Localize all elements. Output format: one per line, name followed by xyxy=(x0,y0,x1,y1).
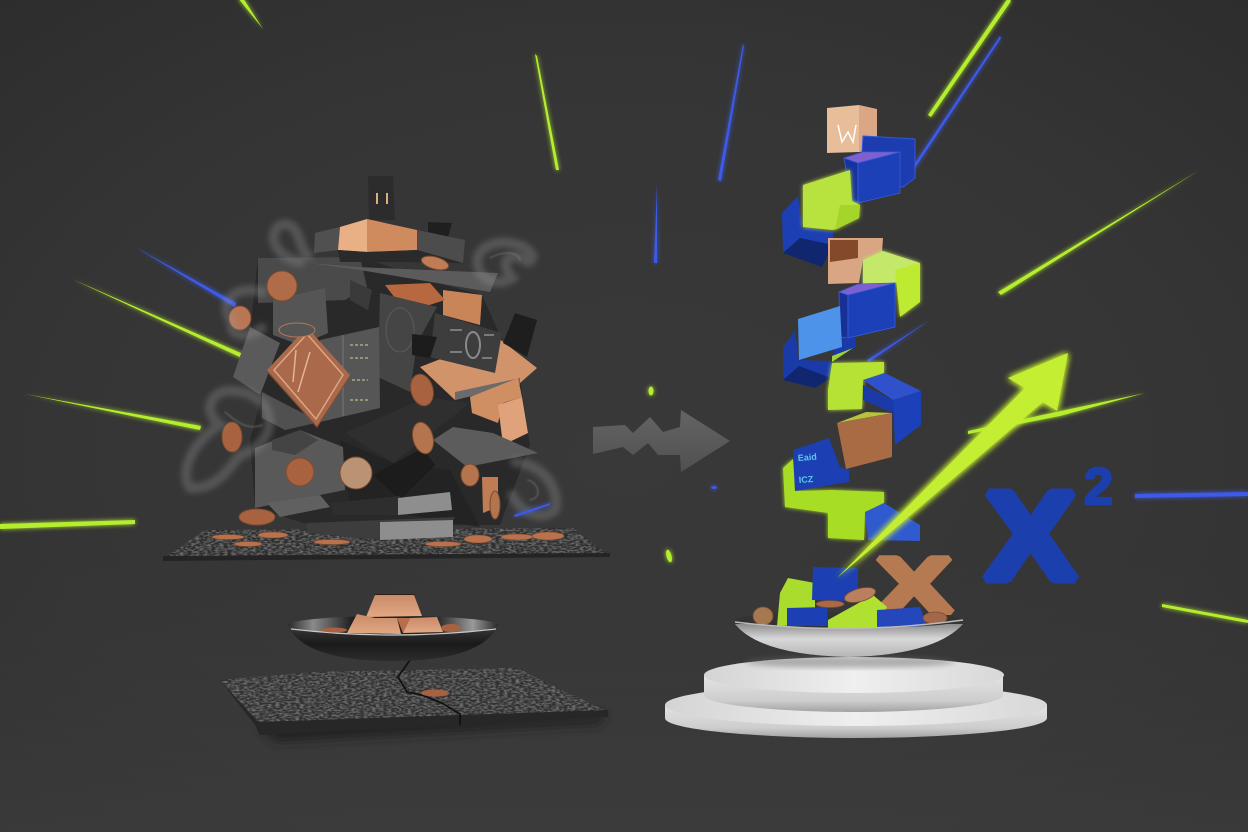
copper-brown block xyxy=(837,412,892,469)
dark mass xyxy=(340,440,480,527)
blue block 4 with glyphs xyxy=(783,331,831,388)
dark emblem box xyxy=(430,313,502,373)
green block 4 xyxy=(783,459,884,540)
top dark tile xyxy=(368,176,395,220)
dark slanted book xyxy=(345,397,470,463)
green block 3 xyxy=(828,362,884,410)
smoke wisps xyxy=(186,224,556,515)
blue streak in front of pile xyxy=(514,503,550,517)
small black tiles xyxy=(412,334,437,358)
coins on slate xyxy=(212,532,564,546)
blue block 5 xyxy=(863,373,921,445)
grey slab, left xyxy=(233,327,280,395)
copper strip xyxy=(482,477,498,513)
light-blue block xyxy=(798,306,856,362)
coins, lower pile xyxy=(222,372,500,525)
copper block, lower right xyxy=(470,378,528,445)
grey box, lower left xyxy=(255,430,345,508)
dish blocks xyxy=(777,567,927,628)
dish xyxy=(735,612,963,657)
blue glyph block: Eaid xyxy=(797,452,817,463)
right: marble dish with blocks, coins and X xyxy=(735,541,963,657)
left: bowl of gold bars on cracked slate xyxy=(220,594,608,742)
grey box, centre left xyxy=(273,288,328,345)
right: marble pedestal xyxy=(665,656,1047,738)
blue light streaks xyxy=(135,36,1248,498)
copper tablet, right xyxy=(420,337,537,400)
coins in bowl and on slate xyxy=(321,624,461,696)
right: ascending stack of blocks xyxy=(782,105,921,541)
lower disc xyxy=(665,684,1047,738)
book 1 xyxy=(330,492,452,515)
book 2 xyxy=(307,517,455,540)
cracked slate xyxy=(220,660,608,742)
dark filler behind pile xyxy=(250,257,530,525)
copper bars xyxy=(347,594,443,634)
copper and slate box xyxy=(314,219,465,263)
blue glyph block xyxy=(793,438,849,491)
small slate tile xyxy=(350,280,372,310)
upper disc xyxy=(704,656,1004,712)
left: chaotic pile on slate xyxy=(163,176,610,561)
green block xyxy=(803,170,860,230)
dark bowl xyxy=(288,616,498,661)
copper cube 2 xyxy=(828,238,883,284)
grey zigzag transformation arrow xyxy=(593,410,730,472)
grey lid xyxy=(267,495,330,517)
coins, upper xyxy=(229,254,450,337)
long grey slab xyxy=(308,263,498,292)
blue X squared: X xyxy=(985,467,1076,606)
copper X: X xyxy=(876,541,952,629)
slate base under the pile xyxy=(163,528,610,561)
copper diamond tablet xyxy=(267,327,350,428)
copper block behind xyxy=(443,290,482,325)
blue front block xyxy=(844,152,900,203)
black box xyxy=(373,448,435,500)
small dark tile xyxy=(428,222,452,237)
dish coins xyxy=(753,585,947,625)
dark box, centre xyxy=(378,293,437,392)
blue back block xyxy=(860,136,915,187)
green growth arrow xyxy=(837,353,1068,578)
blue block 3 xyxy=(839,283,895,338)
blue X squared xyxy=(985,458,1113,606)
top copper cube xyxy=(827,105,877,153)
blue left block xyxy=(782,196,833,267)
grey slab, lower right xyxy=(433,427,538,467)
green light streaks xyxy=(0,0,1248,623)
blue X squared: 2 xyxy=(1084,458,1113,516)
blue wedge xyxy=(865,503,920,541)
dish front rim xyxy=(735,620,963,629)
back grey panel xyxy=(258,257,367,303)
grey panel behind the copper tablet xyxy=(320,327,380,422)
green block 2 xyxy=(863,251,920,317)
blue glyph block: ICZ xyxy=(798,474,814,485)
